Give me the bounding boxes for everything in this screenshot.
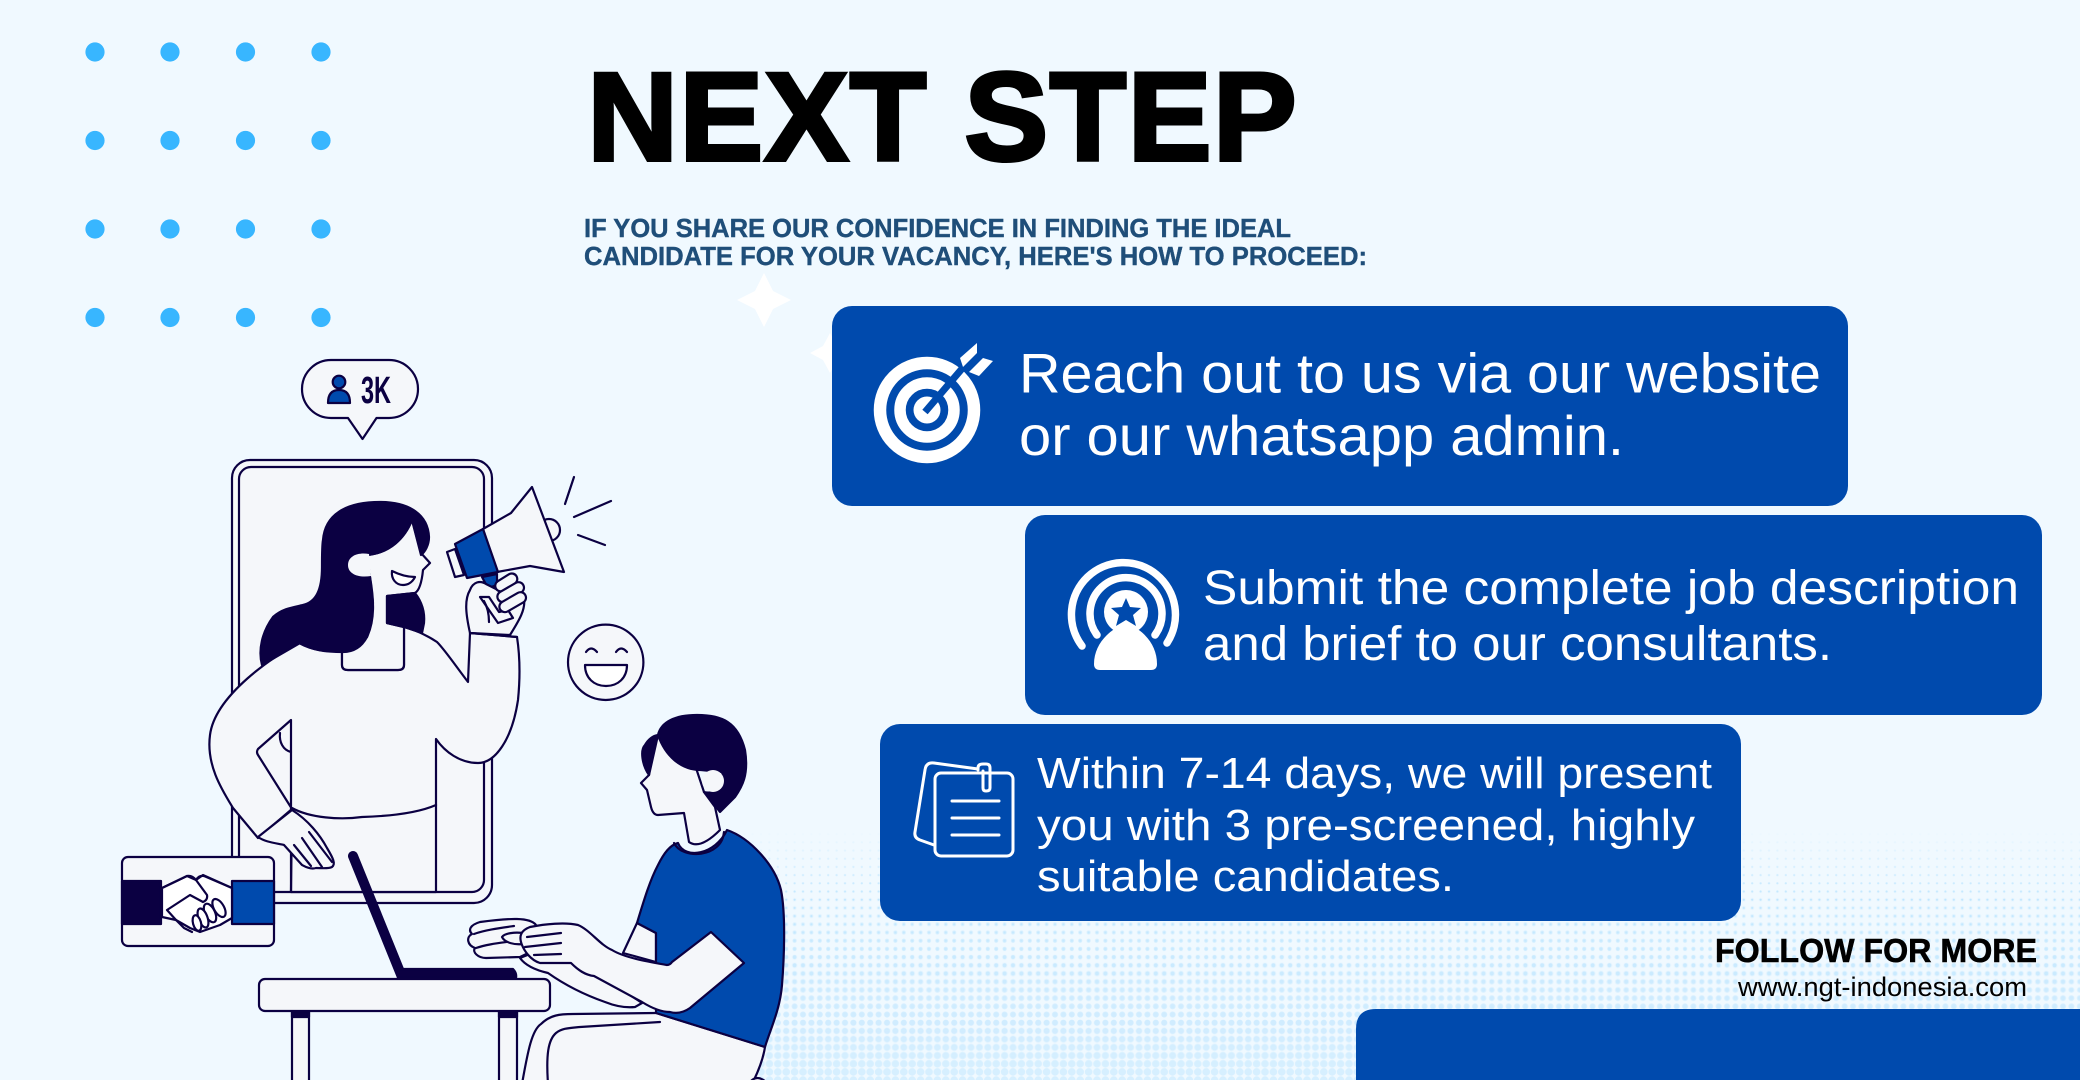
subtitle xyxy=(584,213,1367,271)
step 2 text: and brief to our consultants. xyxy=(1203,618,1832,671)
step 3 text xyxy=(1037,749,1712,901)
step 3 text: you with 3 pre-screened, highly xyxy=(1037,801,1695,850)
phone screen frame xyxy=(232,460,492,903)
call to action: www.ngt-indonesia.com xyxy=(1737,972,2027,1002)
raised hand holding megaphone xyxy=(466,571,528,635)
step 2 text xyxy=(1203,562,2019,671)
title: NEXT STEP xyxy=(588,48,1296,187)
subtitle: IF YOU SHARE OUR CONFIDENCE IN FINDING THE IDEAL xyxy=(584,213,1291,243)
subtitle: CANDIDATE FOR YOUR VACANCY, HERE'S HOW TO PROCEED: xyxy=(584,241,1367,271)
panel: step 2 xyxy=(1025,515,2042,715)
icon: broadcast star xyxy=(1071,563,1175,670)
dot grid decoration xyxy=(85,42,331,327)
icon: megaphone xyxy=(447,487,564,588)
halftone dot texture xyxy=(740,830,2080,1080)
seated man figure xyxy=(468,715,784,1080)
speech bubble with follower count: 3K xyxy=(361,370,391,412)
megaphone sound lines xyxy=(565,477,611,545)
sparkle stars xyxy=(737,273,850,373)
handshake card xyxy=(122,857,274,946)
icon: target with arrow xyxy=(880,343,993,457)
laptop xyxy=(353,856,516,978)
bottom right blue block xyxy=(1356,1009,2080,1080)
woman figure xyxy=(209,502,520,892)
step 2 text: Submit the complete job description xyxy=(1203,562,2019,615)
table xyxy=(259,979,550,1080)
illustration: woman announcing and man at laptop xyxy=(122,360,784,1080)
call to action: FOLLOW FOR MORE xyxy=(1715,932,2037,969)
icon: smiling emoji xyxy=(568,625,643,700)
step 1 text xyxy=(1019,342,1821,467)
panel: step 3 xyxy=(880,724,1741,921)
step 3 text: suitable candidates. xyxy=(1037,852,1454,901)
panel: step 1 xyxy=(832,306,1848,506)
icon: clipped notes xyxy=(915,763,1013,856)
step 1 text: Reach out to us via our website xyxy=(1019,342,1821,404)
step 3 text: Within 7-14 days, we will present xyxy=(1037,749,1712,798)
speech bubble with follower count xyxy=(302,360,418,439)
cuff of raised arm xyxy=(470,633,517,637)
call to action xyxy=(1715,932,2037,1002)
step 1 text: or our whatsapp admin. xyxy=(1019,404,1624,467)
